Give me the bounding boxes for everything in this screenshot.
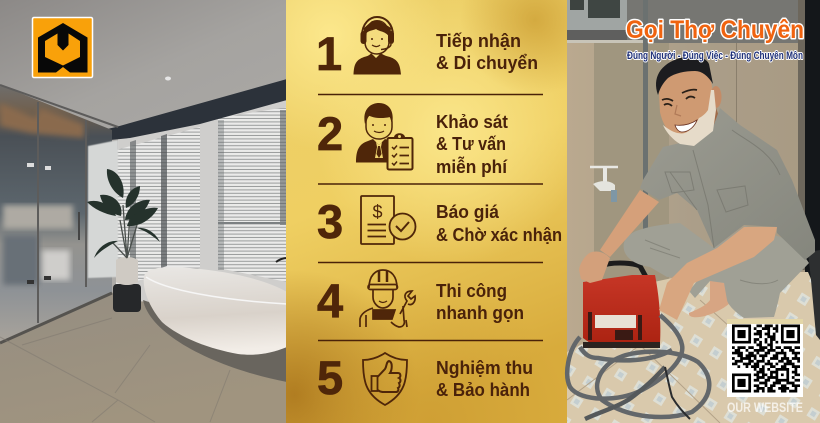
title bbox=[626, 16, 804, 62]
panel: technician photo bbox=[567, 0, 820, 423]
number 4: 4 bbox=[317, 274, 343, 327]
window blinds bbox=[116, 107, 287, 285]
label: miễn phí bbox=[436, 156, 508, 177]
logo bbox=[32, 18, 92, 78]
divider lines bbox=[318, 94, 543, 340]
number 3: 3 bbox=[317, 195, 343, 248]
floor tile lines bbox=[0, 318, 230, 422]
foot bbox=[689, 280, 730, 317]
wall tap bbox=[590, 167, 618, 202]
label: nhanh gọn bbox=[436, 303, 524, 323]
icon: quote document with check: $ bbox=[372, 202, 383, 222]
label bbox=[436, 358, 533, 400]
tiled floor bbox=[567, 272, 820, 423]
number 2: 2 bbox=[317, 107, 343, 160]
label: Nghiệm thu bbox=[436, 358, 533, 378]
eyes and brows bbox=[662, 90, 697, 106]
panel: gold process steps bbox=[286, 0, 568, 423]
number 1: 1 bbox=[316, 27, 342, 80]
right arm bbox=[659, 227, 777, 320]
bathtub bbox=[144, 267, 287, 355]
label bbox=[436, 112, 508, 177]
neck bbox=[690, 108, 722, 152]
icon: shield with thumbs up bbox=[363, 353, 407, 405]
left hand bbox=[579, 251, 610, 283]
pump machine bbox=[583, 263, 660, 348]
label bbox=[436, 281, 524, 323]
title: Gọi Thợ Chuyên bbox=[626, 16, 804, 44]
tub shadow bbox=[143, 300, 287, 382]
glass shower enclosure bbox=[0, 85, 118, 343]
icon: worker with wrench bbox=[360, 270, 415, 327]
head bbox=[659, 68, 714, 140]
step 1 bbox=[316, 17, 538, 80]
panel: bathroom photo bbox=[0, 0, 287, 423]
step 4 bbox=[317, 270, 524, 327]
label: Thi công bbox=[436, 281, 507, 301]
trousers bbox=[624, 223, 809, 318]
label: & Tư vấn bbox=[436, 134, 506, 154]
label: Tiếp nhận bbox=[436, 31, 521, 51]
label: & Chờ xác nhận bbox=[436, 225, 562, 245]
number 5: 5 bbox=[317, 351, 343, 404]
shirt bbox=[640, 108, 815, 260]
QR code bbox=[727, 319, 803, 415]
technician bbox=[579, 57, 815, 320]
step 5 bbox=[317, 351, 533, 405]
icon: consultant with clipboard bbox=[356, 103, 412, 170]
ceiling light bbox=[165, 76, 171, 80]
ceiling beam bbox=[90, 79, 287, 142]
hair bbox=[656, 57, 713, 95]
icon: quote document with check bbox=[361, 196, 416, 244]
label: Báo giá bbox=[436, 202, 500, 222]
plant bbox=[87, 169, 287, 312]
face mask bbox=[663, 90, 716, 146]
smile bbox=[675, 120, 697, 132]
QR caption: OUR WEBSITE bbox=[727, 400, 803, 415]
label: & Di chuyển bbox=[436, 53, 538, 73]
step 2 bbox=[317, 103, 508, 177]
label: & Bảo hành bbox=[436, 380, 530, 400]
left arm bbox=[600, 190, 659, 257]
hose coils bbox=[567, 315, 709, 419]
step 3 bbox=[317, 195, 562, 248]
icon: headset agent bbox=[354, 17, 401, 74]
label bbox=[436, 202, 562, 245]
label: Khảo sát bbox=[436, 112, 508, 132]
label bbox=[436, 31, 538, 73]
